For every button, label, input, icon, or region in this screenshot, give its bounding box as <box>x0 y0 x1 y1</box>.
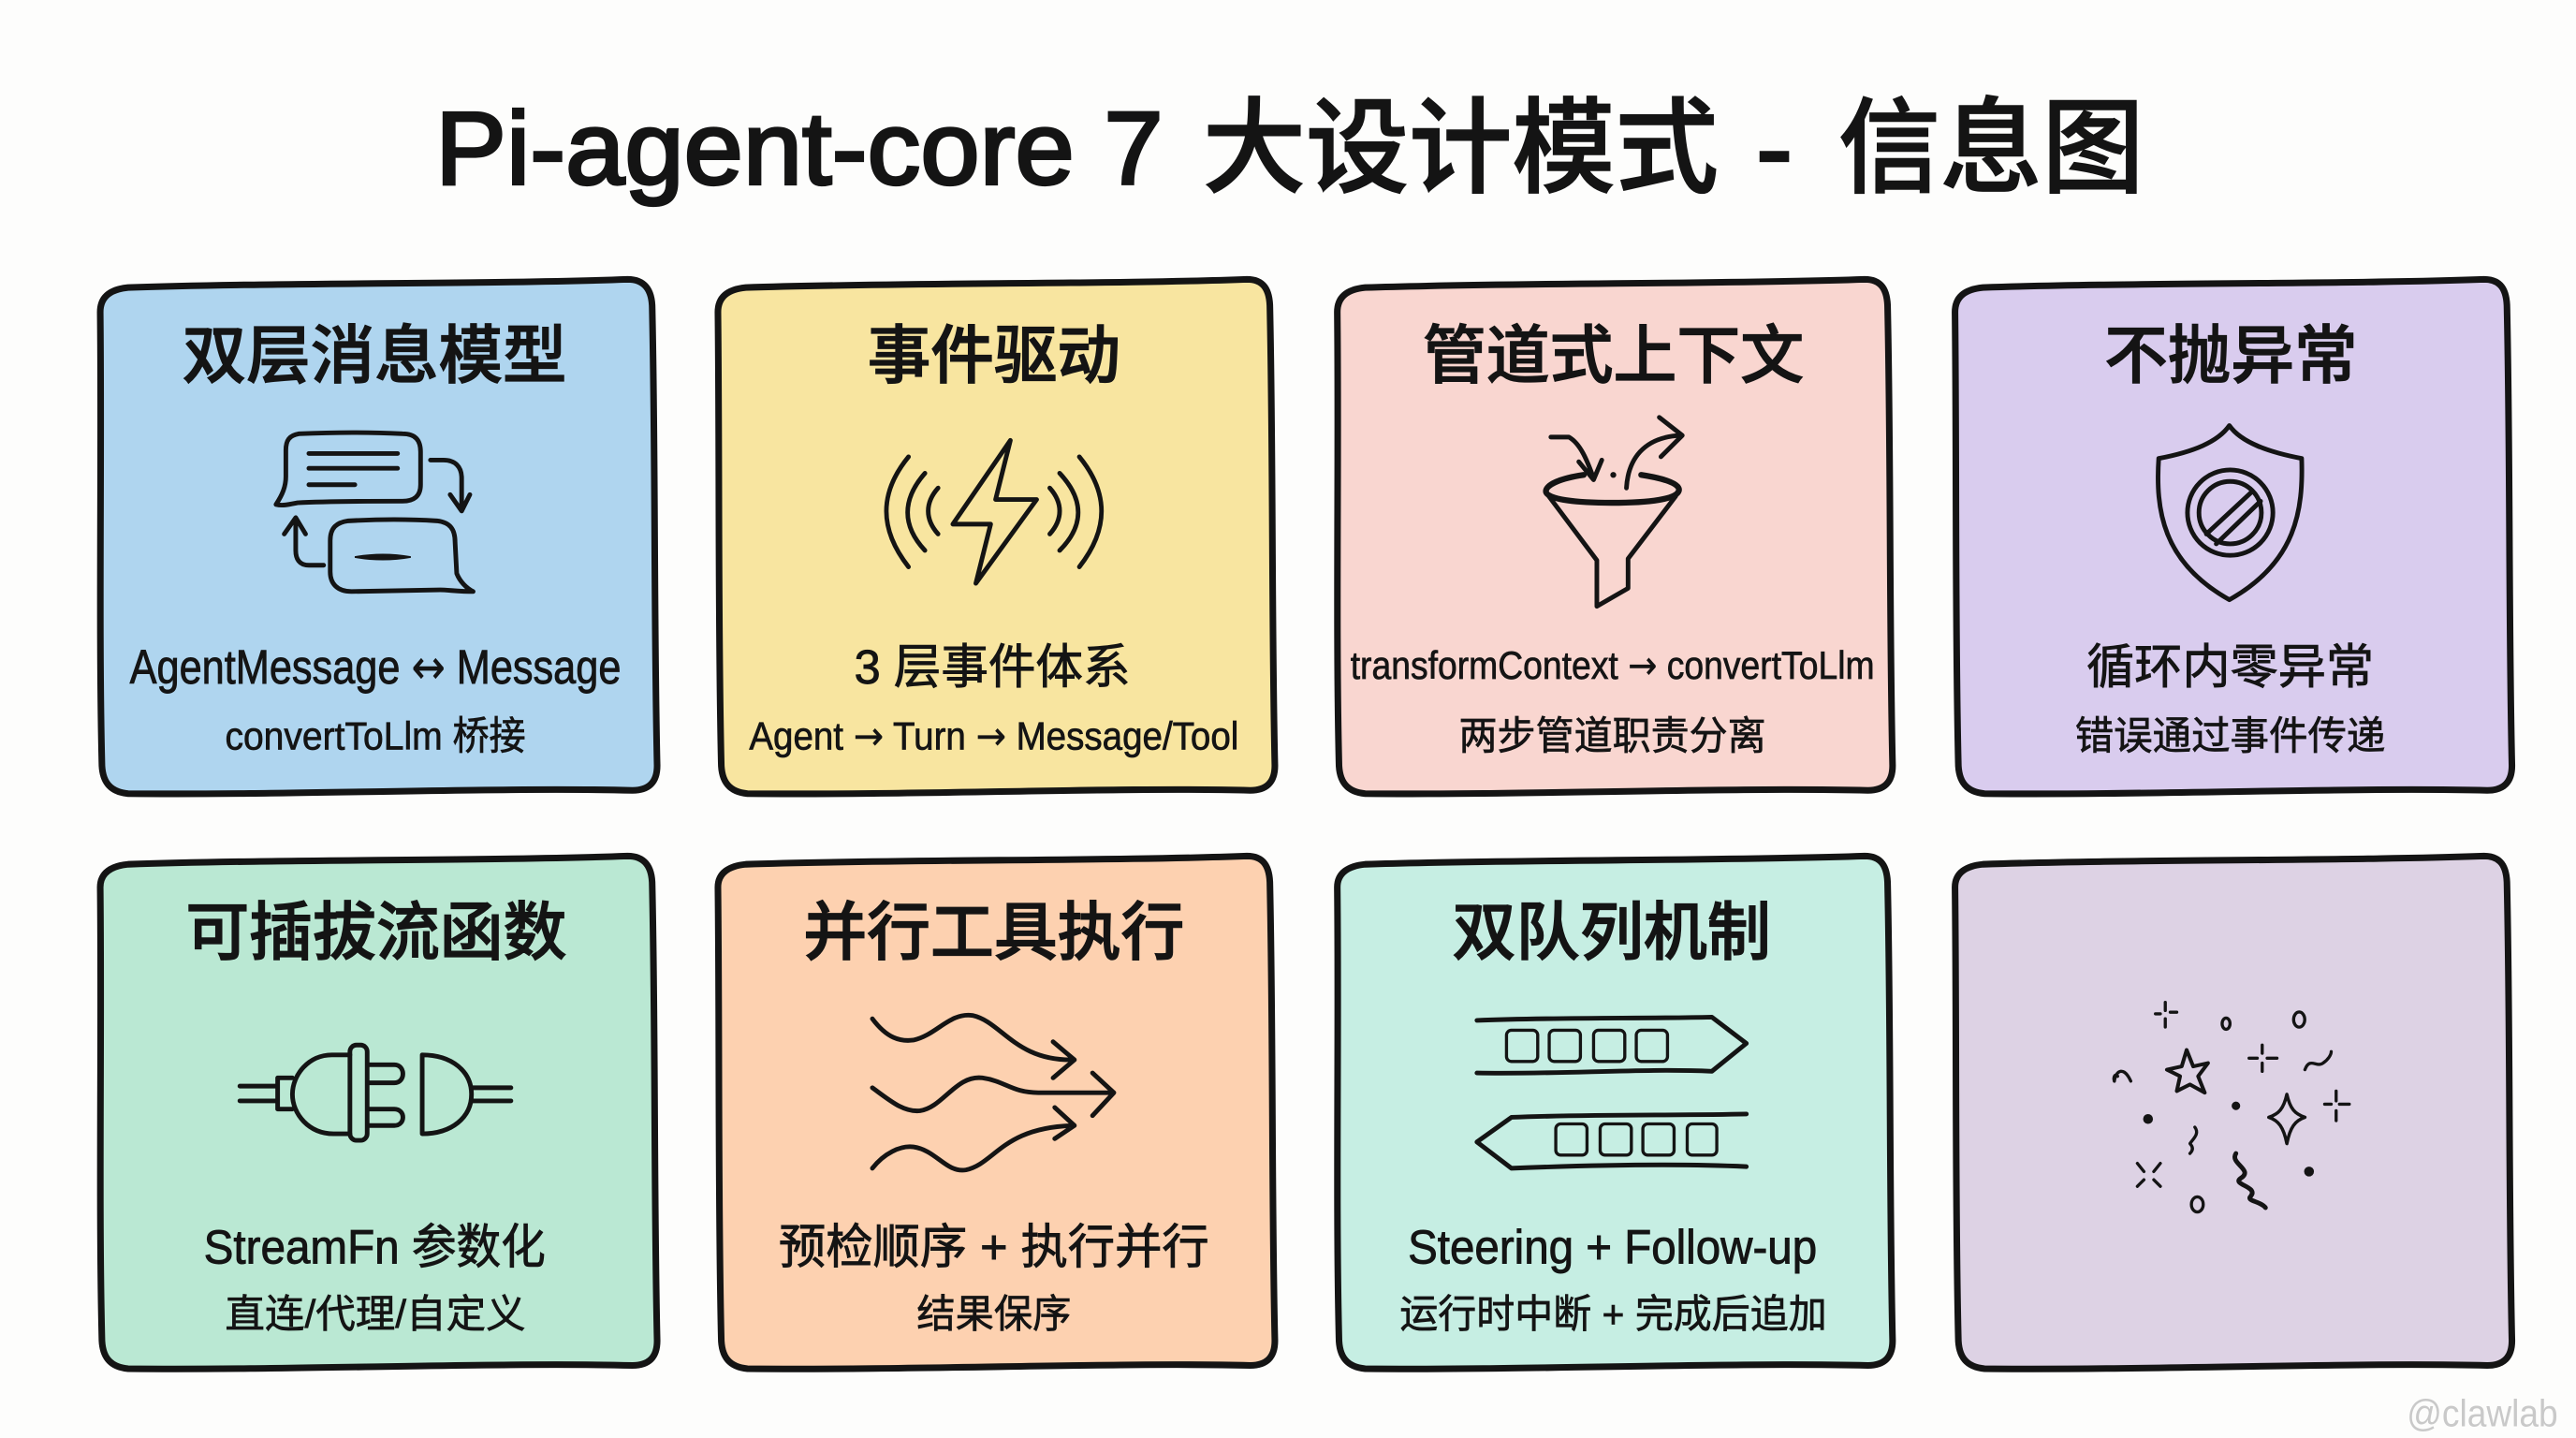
body line 1: StreamFn 参数化 <box>204 1221 546 1274</box>
heading: 并行工具执行 <box>803 897 1184 969</box>
icon: funnel with arrows <box>1546 418 1682 607</box>
heading: 双队列机制 <box>1453 897 1771 969</box>
panel: 并行工具执行 <box>718 856 1275 1369</box>
body line 2: 错误通过事件传递 <box>2075 713 2385 757</box>
icon: plug and socket <box>240 1045 511 1140</box>
icon: lightning bolt with signal waves <box>886 440 1102 583</box>
body line 2: 两步管道职责分离 <box>1459 713 1766 757</box>
panel: 双队列机制 <box>1338 856 1893 1369</box>
title: Pi-agent-core 7 <box>435 92 1164 207</box>
watermark: @clawlab <box>2407 1391 2558 1434</box>
body line 2: 运行时中断 + 完成后追加 <box>1399 1292 1827 1336</box>
body line 1: 预检顺序 + 执行并行 <box>779 1221 1209 1274</box>
icon: shield with prohibition sign <box>2158 426 2302 600</box>
panel: decorative doodles <box>1955 856 2512 1369</box>
heading: 双层消息模型 <box>183 320 567 392</box>
body line 1: 循环内零异常 <box>2086 640 2374 694</box>
title: 信息图 <box>1838 92 2144 207</box>
icon: parallel wavy arrows <box>872 1015 1114 1170</box>
body line 1: transformContext → convertToLlm <box>1351 642 1875 688</box>
body line 1: AgentMessage ↔ Message <box>130 640 621 696</box>
body line 2: convertToLlm 桥接 <box>225 713 526 757</box>
heading: 事件驱动 <box>868 320 1120 392</box>
body line 1: Steering + Follow-up <box>1408 1221 1817 1274</box>
body line 2: 结果保序 <box>916 1292 1071 1336</box>
body line 1: 3 层事件体系 <box>855 640 1131 694</box>
heading: 管道式上下文 <box>1423 320 1804 392</box>
icon: message bubbles with swap arrows <box>276 433 473 592</box>
panel: 管道式上下文 <box>1338 279 1893 794</box>
icon: two opposing queues <box>1477 1017 1747 1168</box>
icon: scattered sparkles and stars <box>2114 1003 2349 1212</box>
title: - <box>1756 92 1793 207</box>
panel: 可插拔流函数 <box>100 856 657 1369</box>
body line 2: Agent → Turn → Message/Tool <box>749 712 1238 758</box>
panel: 事件驱动 <box>718 279 1275 794</box>
heading: 可插拔流函数 <box>185 897 567 969</box>
body line 2: 直连/代理/自定义 <box>225 1292 526 1336</box>
title: 大设计模式 <box>1203 92 1719 207</box>
heading: 不抛异常 <box>2104 320 2358 392</box>
panel: 不抛异常 <box>1955 279 2512 794</box>
panel: 双层消息模型 <box>100 279 657 794</box>
